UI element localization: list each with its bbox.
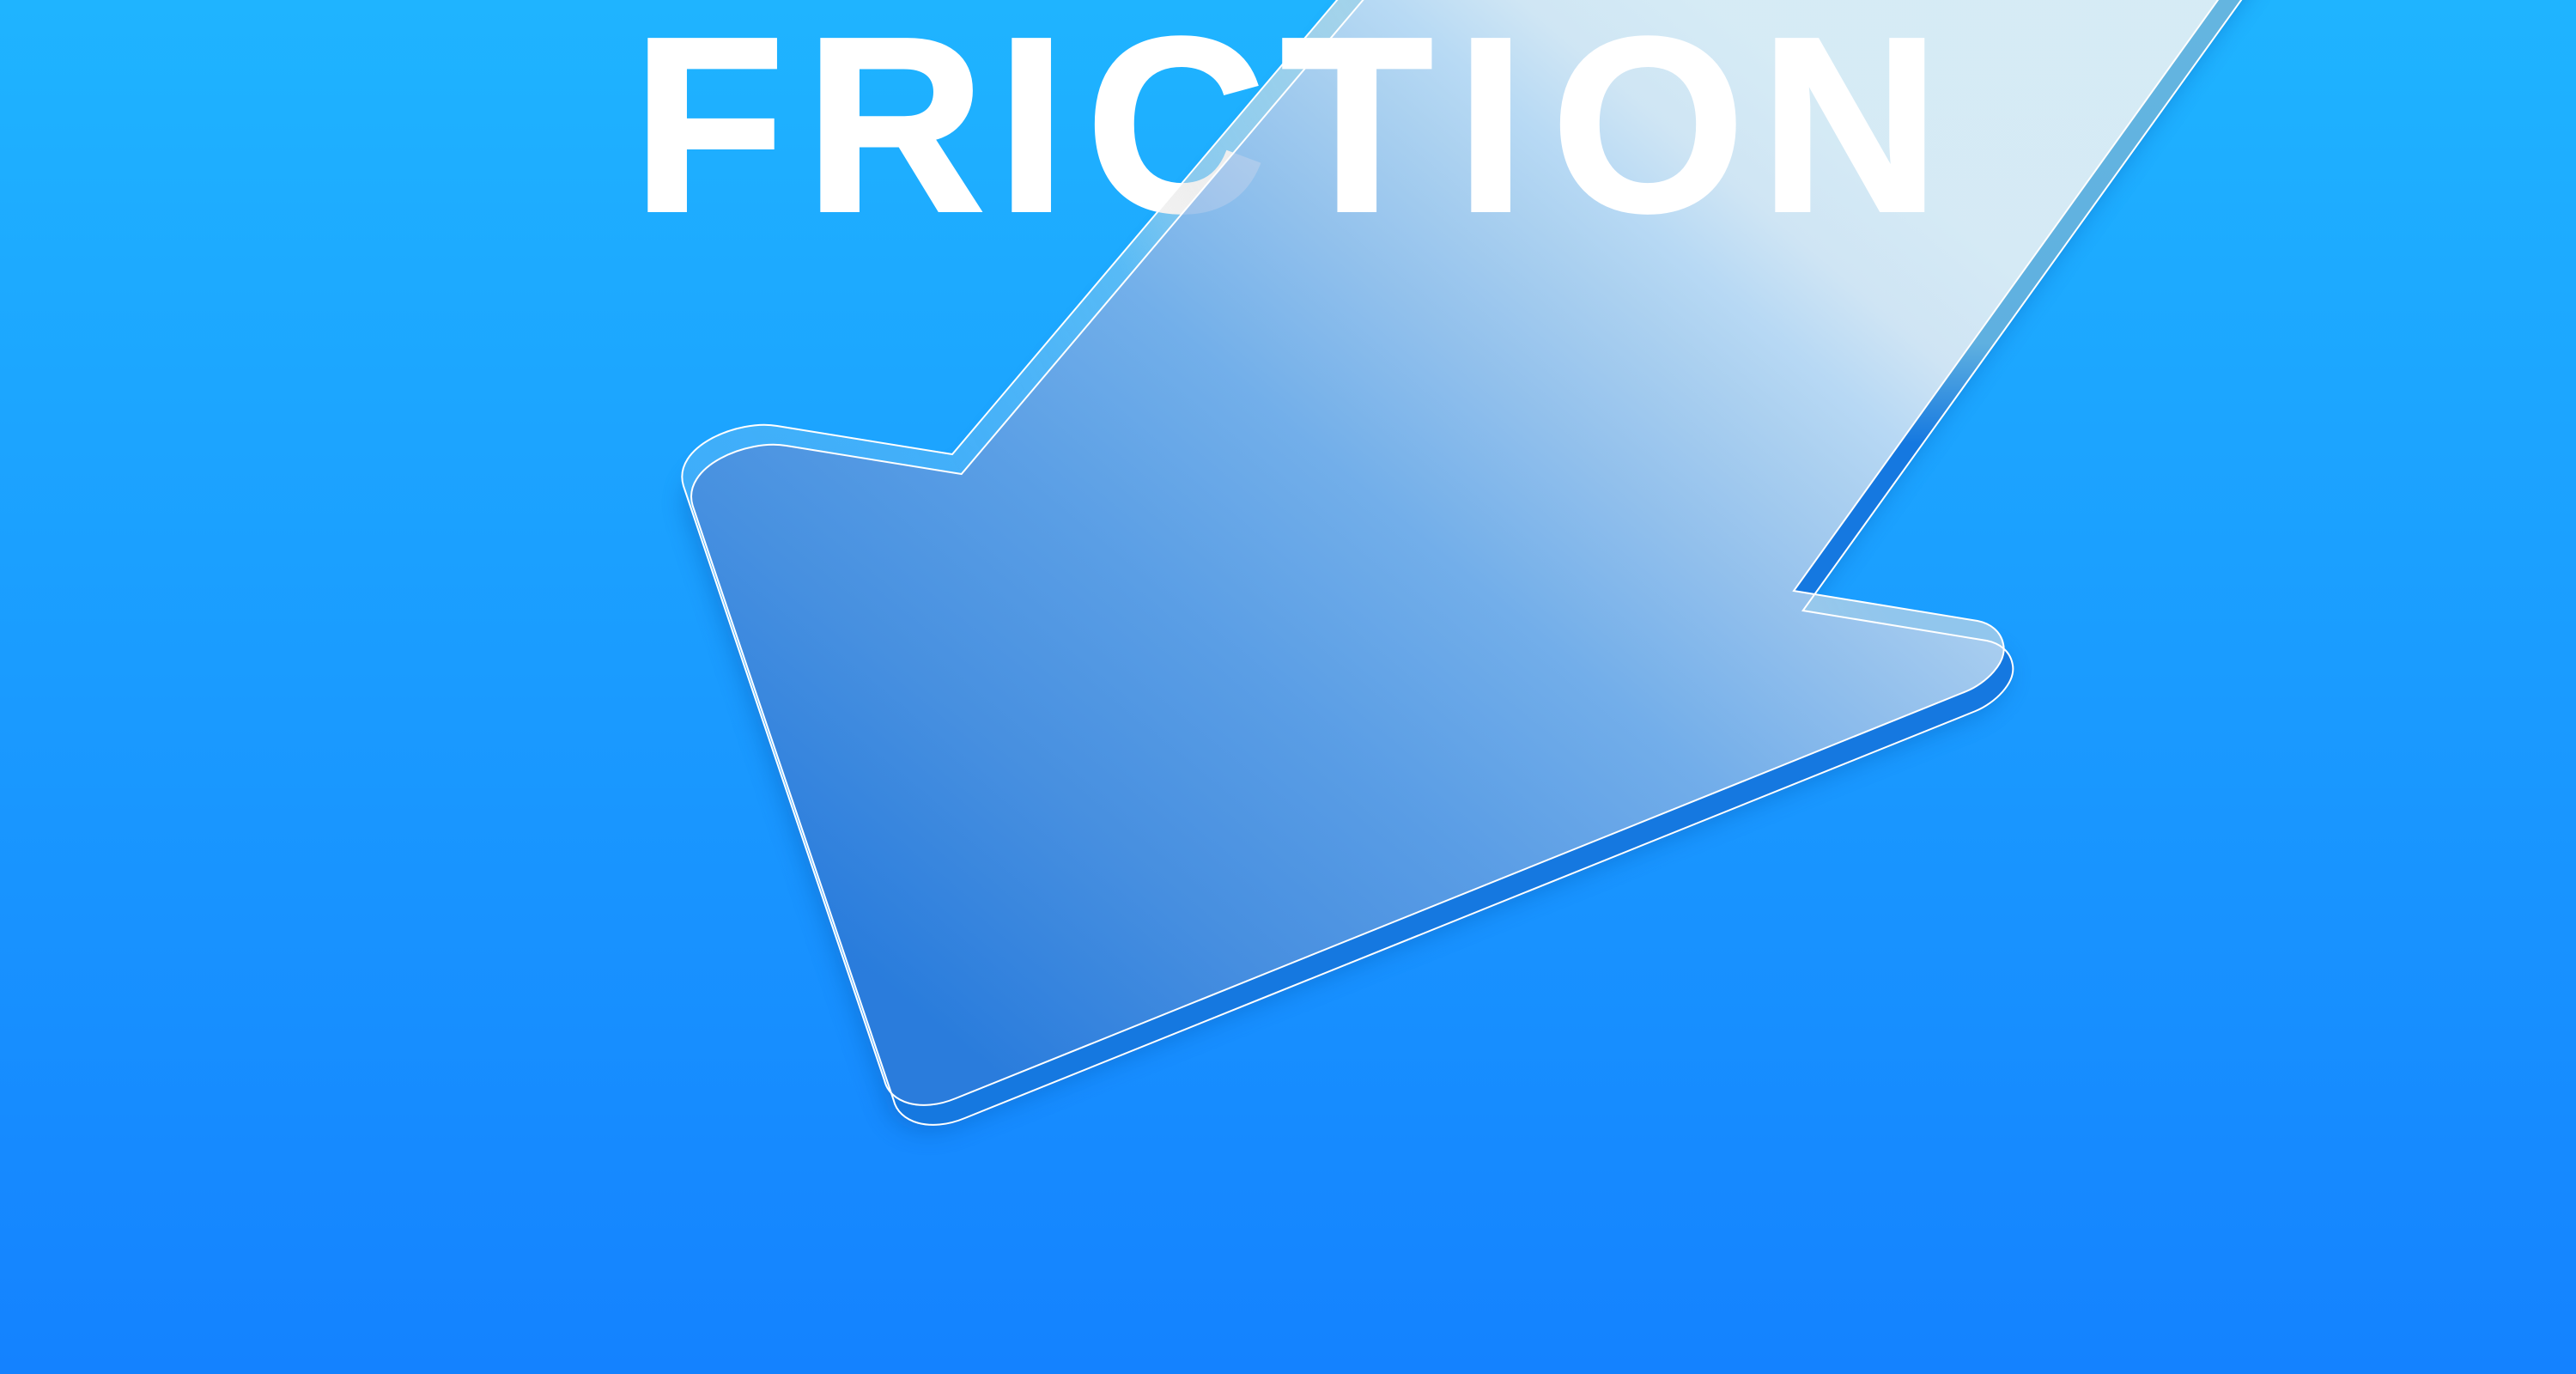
glass arrow bbox=[1271, 0, 2243, 996]
arrow outline front bbox=[691, 0, 2264, 1125]
arrow shadow bbox=[685, 0, 2258, 1131]
arrow lower side wall bbox=[893, 0, 2240, 1124]
arrow outline back bbox=[682, 0, 2255, 1105]
arrow portion overlapping the letter C bbox=[681, 77, 1271, 1126]
arrow front face bbox=[682, 0, 2255, 1105]
arrow upper side wall bbox=[683, 0, 2002, 1088]
